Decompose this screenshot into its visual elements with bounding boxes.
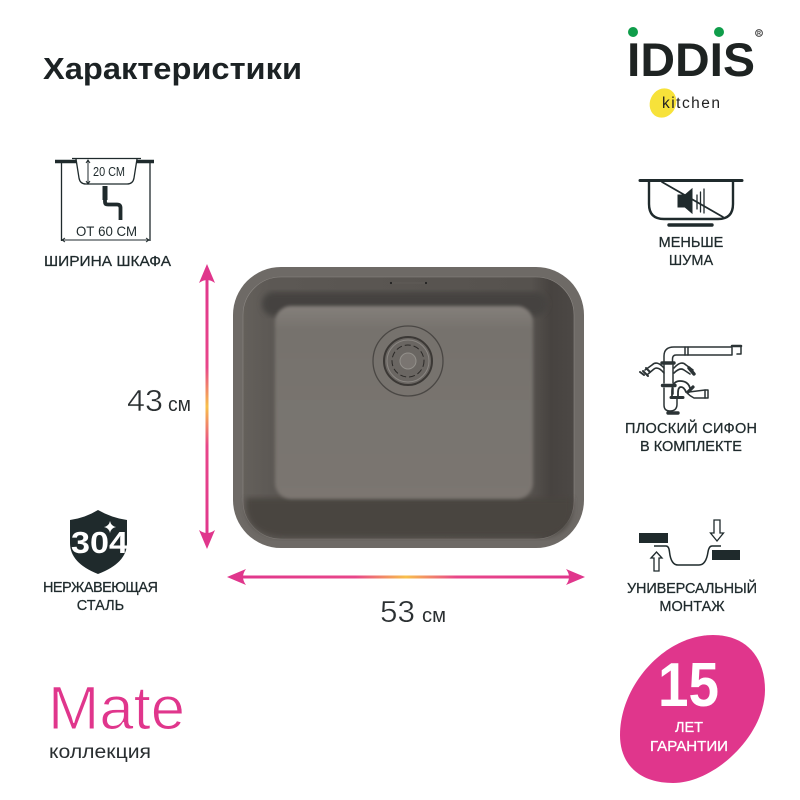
collection caption: коллекция bbox=[49, 742, 151, 763]
logo: IDDIS kitchen bbox=[627, 27, 762, 122]
drain bbox=[373, 326, 443, 396]
collection name: Mate bbox=[48, 674, 185, 742]
height value: 43 bbox=[127, 383, 163, 418]
label: stainless steel: НЕРЖАВЕЮЩАЯ bbox=[43, 580, 158, 596]
icon: flat siphon bbox=[640, 346, 741, 413]
width value bbox=[380, 594, 446, 629]
width value: 53 bbox=[380, 594, 415, 629]
icon: universal mounting bbox=[639, 520, 740, 571]
title: Характеристики bbox=[43, 51, 302, 86]
sink photo bbox=[233, 267, 584, 548]
logo: IDDIS kitchen: R bbox=[757, 31, 761, 37]
icon: less noise bbox=[640, 180, 742, 225]
height value bbox=[127, 383, 191, 418]
label: universal mounting: УНИВЕРСАЛЬНЫЙ bbox=[627, 579, 757, 597]
overflow slot bbox=[391, 282, 427, 284]
icon: 304 steel shield bbox=[70, 510, 129, 574]
label: less noise: МЕНЬШЕ bbox=[659, 235, 724, 251]
warranty badge bbox=[620, 635, 765, 783]
warranty badge: ГАРАНТИИ bbox=[650, 739, 728, 755]
warranty badge: 15 bbox=[658, 651, 719, 720]
width value: см bbox=[422, 605, 446, 627]
icon: 304 steel shield: 304 bbox=[71, 525, 129, 560]
label: universal mounting: МОНТАЖ bbox=[659, 599, 725, 615]
arrow: height dimension bbox=[199, 264, 215, 549]
icon: cabinet width: ОТ 60 СМ bbox=[76, 223, 137, 239]
icon: cabinet width: 20 СМ bbox=[93, 165, 125, 179]
logo: IDDIS kitchen: kitchen bbox=[662, 95, 720, 112]
label: flat siphon: В КОМПЛЕКТЕ bbox=[640, 439, 742, 455]
logo: IDDIS kitchen: IDDIS bbox=[627, 33, 755, 86]
height value: см bbox=[168, 394, 191, 416]
warranty badge: ЛЕТ bbox=[675, 720, 703, 736]
icon: cabinet width bbox=[55, 158, 154, 242]
label: stainless steel: СТАЛЬ bbox=[77, 598, 124, 614]
arrow: width dimension bbox=[227, 569, 585, 585]
label: less noise: ШУМА bbox=[669, 253, 713, 269]
label: cabinet width: ШИРИНА ШКАФА bbox=[44, 254, 171, 270]
label: flat siphon: ПЛОСКИЙ СИФОН bbox=[625, 419, 757, 437]
